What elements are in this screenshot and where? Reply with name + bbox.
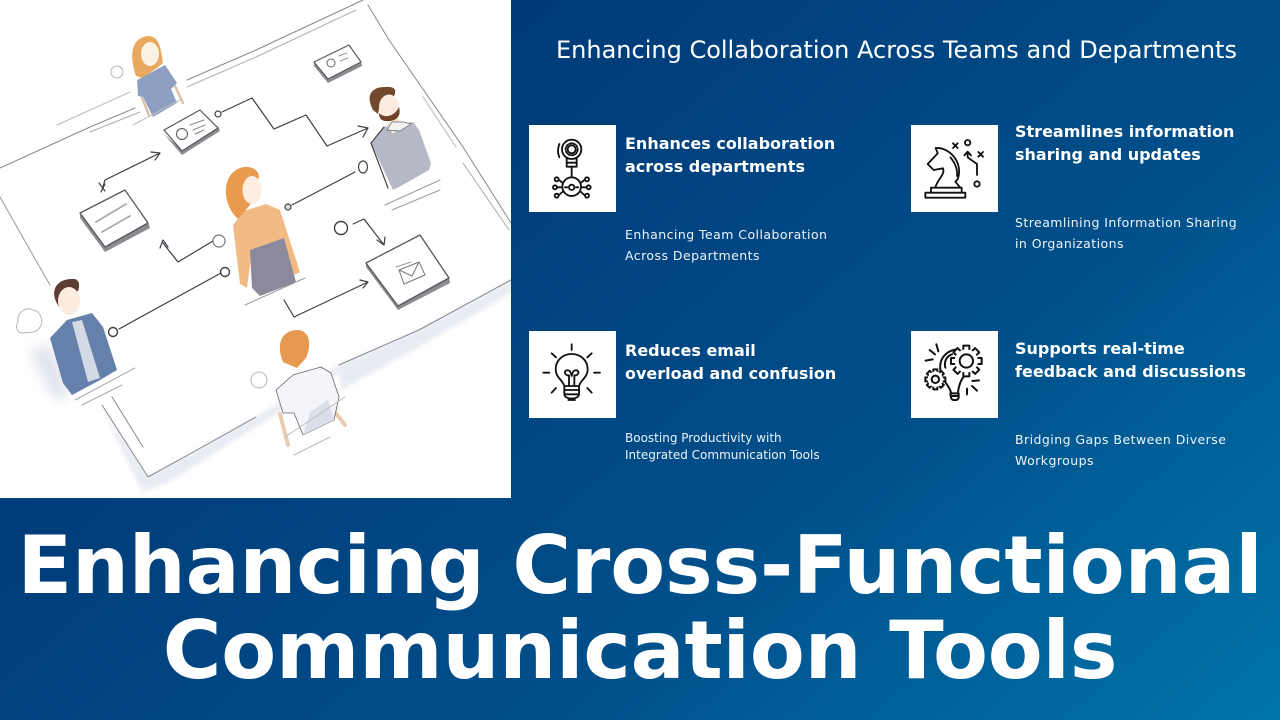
card: left (80, 190, 150, 252)
person: woman centre (226, 167, 305, 305)
board shadow (102, 280, 511, 492)
panel: real-time feedback (911, 331, 1246, 468)
icon: bulb and network (529, 125, 616, 212)
description: Streamlining Information Sharing (1015, 215, 1237, 230)
heading: Streamlines information (1015, 122, 1234, 141)
flow arrows (99, 98, 385, 336)
person: man left (30, 279, 135, 405)
card: top right (314, 45, 362, 83)
heading: Reduces email (625, 341, 756, 360)
sketch blobs (17, 66, 267, 388)
description: Integrated Communication Tools (625, 448, 820, 462)
heading: Enhances collaboration (625, 134, 835, 153)
board outline (0, 0, 511, 477)
heading (625, 134, 835, 176)
description: Boosting Productivity with (625, 431, 782, 445)
description: Workgroups (1015, 453, 1094, 468)
panel: collaboration (529, 125, 835, 263)
card: mail (366, 235, 450, 310)
description: Across Departments (625, 248, 760, 263)
description (625, 431, 820, 462)
card: top centre (164, 110, 220, 155)
person: woman top (132, 36, 183, 125)
heading: overload and confusion (625, 364, 836, 383)
description (1015, 215, 1237, 251)
main title (17, 519, 1263, 697)
heading: across departments (625, 157, 805, 176)
main title: Communication Tools (163, 604, 1117, 697)
panel: information sharing (911, 122, 1237, 251)
icon: chess knight strategy (911, 125, 998, 212)
person: bearded man right (370, 87, 440, 210)
panel: email overload (529, 331, 836, 462)
illustration: team workflow sketch (0, 0, 511, 498)
heading: sharing and updates (1015, 145, 1201, 164)
description (1015, 432, 1226, 468)
description: Enhancing Team Collaboration (625, 227, 827, 242)
description (625, 227, 827, 263)
description: in Organizations (1015, 236, 1124, 251)
heading (625, 341, 836, 383)
main title: Enhancing Cross-Functional (17, 519, 1263, 612)
icon: light bulb (529, 331, 616, 418)
heading: Supports real-time (1015, 339, 1185, 358)
heading (1015, 122, 1234, 164)
heading: feedback and discussions (1015, 362, 1246, 381)
heading (1015, 339, 1246, 381)
icon: bulb with gears (911, 331, 998, 418)
section heading: Enhancing Collaboration Across Teams and Departments (556, 36, 1237, 64)
workflow cards (80, 45, 450, 310)
description: Bridging Gaps Between Diverse (1015, 432, 1226, 447)
person: man from behind (276, 330, 345, 455)
